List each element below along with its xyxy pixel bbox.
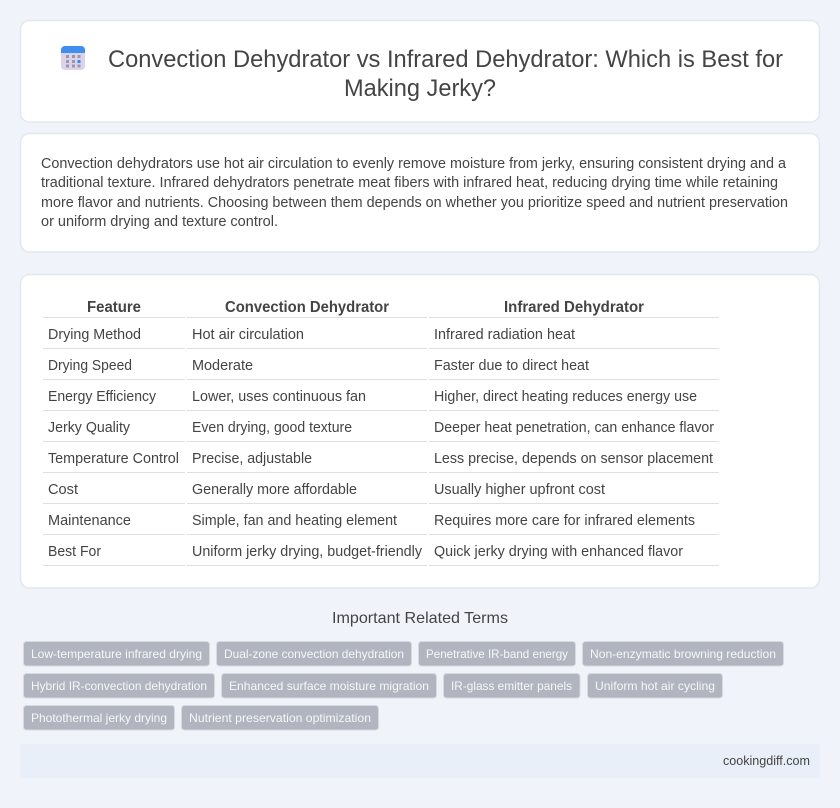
row: best for: Quick jerky drying with enhanced flavor — [434, 544, 683, 560]
chip: Non-enzymatic browning reduction — [590, 647, 776, 661]
row: energy efficiency: Higher, direct heating reduces energy use — [434, 389, 697, 405]
chip — [588, 674, 722, 698]
chip: Penetrative IR-band energy — [426, 647, 568, 661]
row: drying method: Infrared radiation heat — [434, 327, 575, 343]
footer — [20, 744, 820, 778]
summary text — [41, 156, 788, 230]
row: cost — [48, 482, 605, 498]
chip — [444, 674, 580, 698]
panel: comparison table — [20, 274, 820, 588]
summary text: or uniform drying and texture control. — [41, 214, 278, 230]
panel: title card — [20, 20, 820, 122]
table header — [87, 299, 644, 316]
title: Making Jerky? — [344, 75, 496, 102]
related term chips — [24, 642, 784, 730]
row: cost: Generally more affordable — [192, 482, 357, 498]
chip — [418, 642, 576, 666]
row: energy efficiency: Lower, uses continuous fan — [192, 389, 366, 405]
row: jerky quality: Even drying, good texture — [192, 420, 352, 436]
panel: summary — [20, 134, 820, 252]
row: energy efficiency: Energy Efficiency — [48, 389, 157, 405]
row: temperature control: Temperature Control — [48, 451, 179, 467]
row: jerky quality: Deeper heat penetration, can enhance flavor — [434, 420, 714, 436]
row: maintenance: Requires more care for infrared elements — [434, 513, 695, 529]
row: energy efficiency — [48, 389, 697, 405]
row: cost: Cost — [48, 482, 78, 498]
chip: Enhanced surface moisture migration — [229, 679, 429, 693]
row: best for — [48, 544, 683, 560]
row: drying speed: Moderate — [192, 358, 253, 374]
chip — [24, 674, 214, 698]
row: drying method: Hot air circulation — [192, 327, 304, 343]
chip — [582, 642, 784, 666]
chip: Nutrient preservation optimization — [189, 711, 371, 725]
row: temperature control: Precise, adjustable — [192, 451, 312, 467]
row: maintenance: Simple, fan and heating element — [192, 513, 397, 529]
row: jerky quality: Jerky Quality — [48, 420, 131, 436]
title: Convection Dehydrator vs Infrared Dehydrator: Which is Best for — [108, 46, 783, 73]
chip: Low-temperature infrared drying — [31, 647, 202, 661]
chip: IR-glass emitter panels — [451, 679, 572, 693]
row: jerky quality — [48, 420, 714, 436]
summary text: Convection dehydrators use hot air circulation to evenly remove moisture from jerky, ensuring consistent drying and a — [41, 156, 786, 172]
chip — [222, 674, 436, 698]
row: best for: Uniform jerky drying, budget-friendly — [192, 544, 423, 560]
row: maintenance: Maintenance — [48, 513, 131, 529]
chip: Dual-zone convection dehydration — [224, 647, 404, 661]
summary text: more flavor and nutrients. Choosing between them depends on whether you prioritize speed and nutrient preservation — [41, 195, 788, 211]
icon: calendar — [61, 46, 85, 70]
table header: Convection Dehydrator — [225, 299, 389, 316]
chip: Hybrid IR-convection dehydration — [31, 679, 207, 693]
row: drying speed: Faster due to direct heat — [434, 358, 589, 374]
row: temperature control — [48, 451, 713, 467]
row: drying speed — [48, 358, 589, 374]
row: cost: Usually higher upfront cost — [434, 482, 605, 498]
chip — [216, 642, 412, 666]
heading: related terms: Important Related Terms — [332, 610, 508, 627]
chip: Uniform hot air cycling — [595, 679, 715, 693]
row: drying speed: Drying Speed — [48, 358, 132, 374]
row: drying method — [48, 327, 575, 343]
row: temperature control: Less precise, depends on sensor placement — [434, 451, 713, 467]
chip — [24, 642, 210, 666]
chip — [24, 706, 174, 730]
table header: Feature — [87, 299, 141, 316]
table header: Infrared Dehydrator — [504, 299, 644, 316]
footer: cookingdiff.com — [723, 754, 810, 768]
row: best for: Best For — [48, 544, 101, 560]
summary text: traditional texture. Infrared dehydrators penetrate meat fibers with infrared heat, reducing drying time while retaining — [41, 175, 778, 191]
row: maintenance — [48, 513, 695, 529]
title — [108, 46, 783, 102]
chip — [182, 706, 378, 730]
chip: Photothermal jerky drying — [31, 711, 167, 725]
row: drying method: Drying Method — [48, 327, 141, 343]
